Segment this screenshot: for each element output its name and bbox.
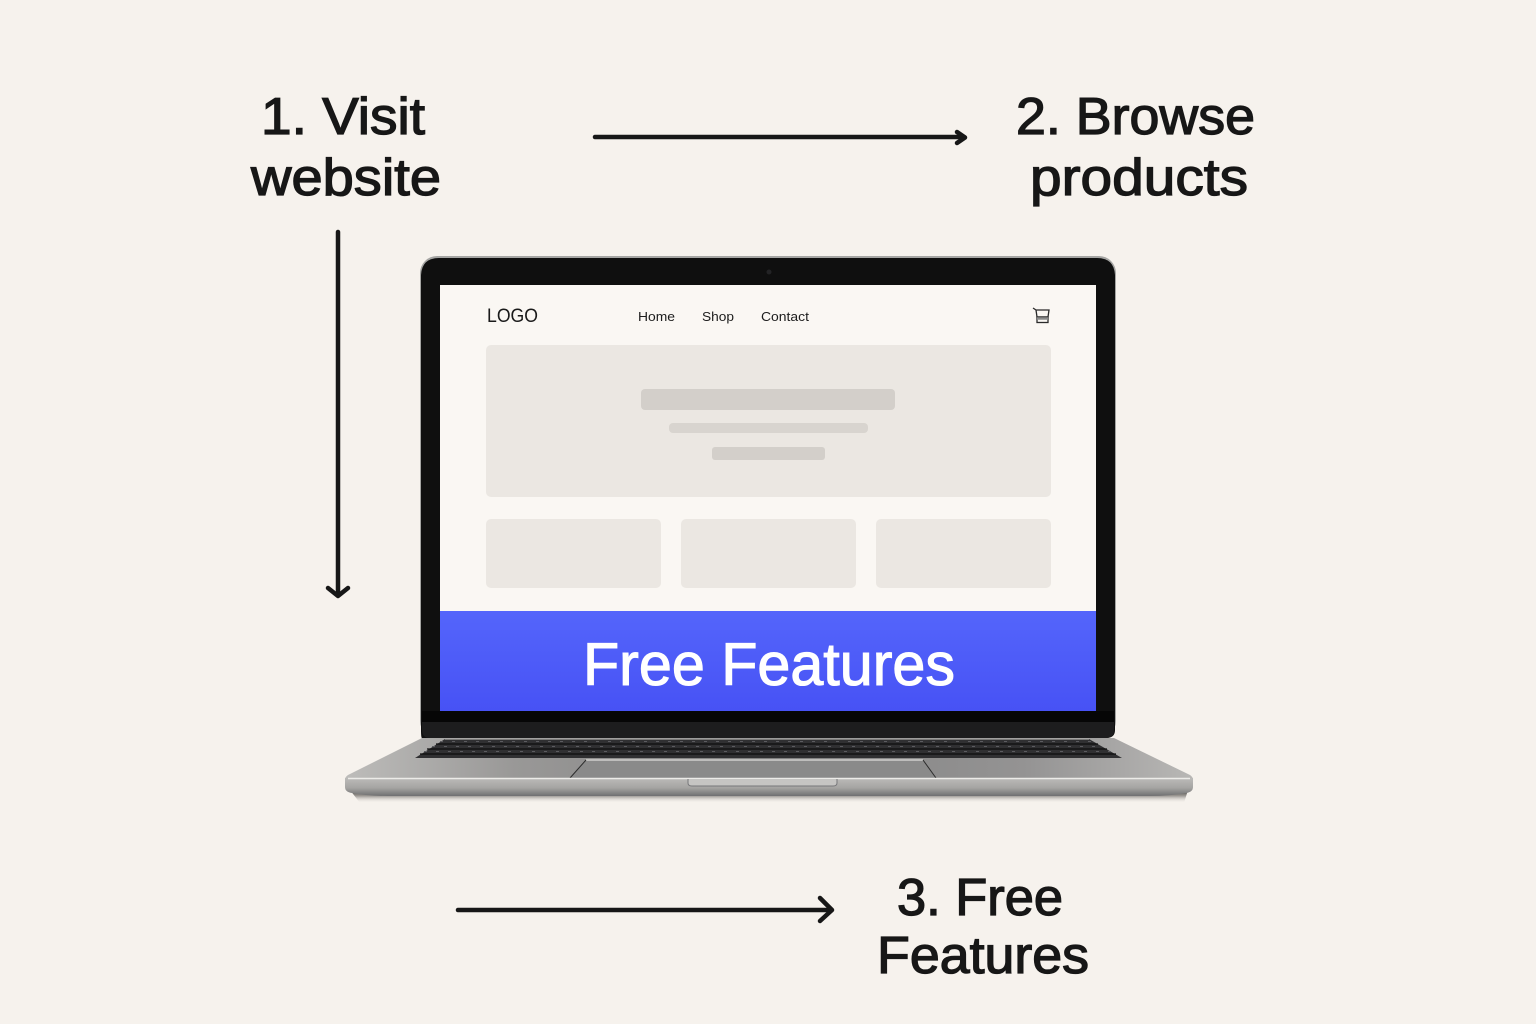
step 1 heading: 1. Visit bbox=[261, 88, 426, 146]
product card 1 bbox=[486, 519, 661, 588]
laptop screen bbox=[440, 285, 1096, 611]
step 3 heading bbox=[877, 869, 1089, 985]
step 3 heading: 3. Free bbox=[897, 869, 1063, 927]
laptop base deck bbox=[345, 738, 1193, 780]
arrow: step 1 to step 2 bbox=[595, 132, 965, 143]
arrow: step 1 down to laptop bbox=[328, 232, 348, 596]
laptop front edge bbox=[345, 778, 1193, 796]
step 2 heading: products bbox=[1030, 149, 1248, 207]
site logo: LOGO bbox=[487, 306, 538, 327]
webcam bbox=[766, 270, 772, 274]
laptop lid bbox=[420, 256, 1116, 738]
step 2 heading bbox=[1016, 88, 1255, 207]
step 1 heading bbox=[250, 88, 441, 207]
arrow: laptop to step 3 bbox=[458, 898, 832, 921]
icon: shopping cart bbox=[1033, 308, 1049, 322]
site navigation: Shop bbox=[702, 309, 734, 324]
laptop lid notch bbox=[688, 779, 837, 786]
laptop shadow bbox=[350, 790, 1188, 803]
product card 2 bbox=[681, 519, 856, 588]
step 2 heading: 2. Browse bbox=[1016, 88, 1255, 146]
site navigation bbox=[638, 309, 809, 324]
banner: free features: Free Features bbox=[583, 631, 955, 698]
hero placeholder bbox=[486, 345, 1051, 497]
laptop bbox=[345, 256, 1193, 803]
step 3 heading: Features bbox=[877, 927, 1089, 985]
site navigation: Home bbox=[638, 309, 675, 324]
banner: free features bbox=[440, 611, 1096, 711]
site navigation: Contact bbox=[761, 309, 809, 324]
step 1 heading: website bbox=[250, 149, 441, 207]
laptop keyboard bbox=[415, 739, 1122, 758]
laptop trackpad bbox=[570, 760, 936, 778]
product card 3 bbox=[876, 519, 1051, 588]
